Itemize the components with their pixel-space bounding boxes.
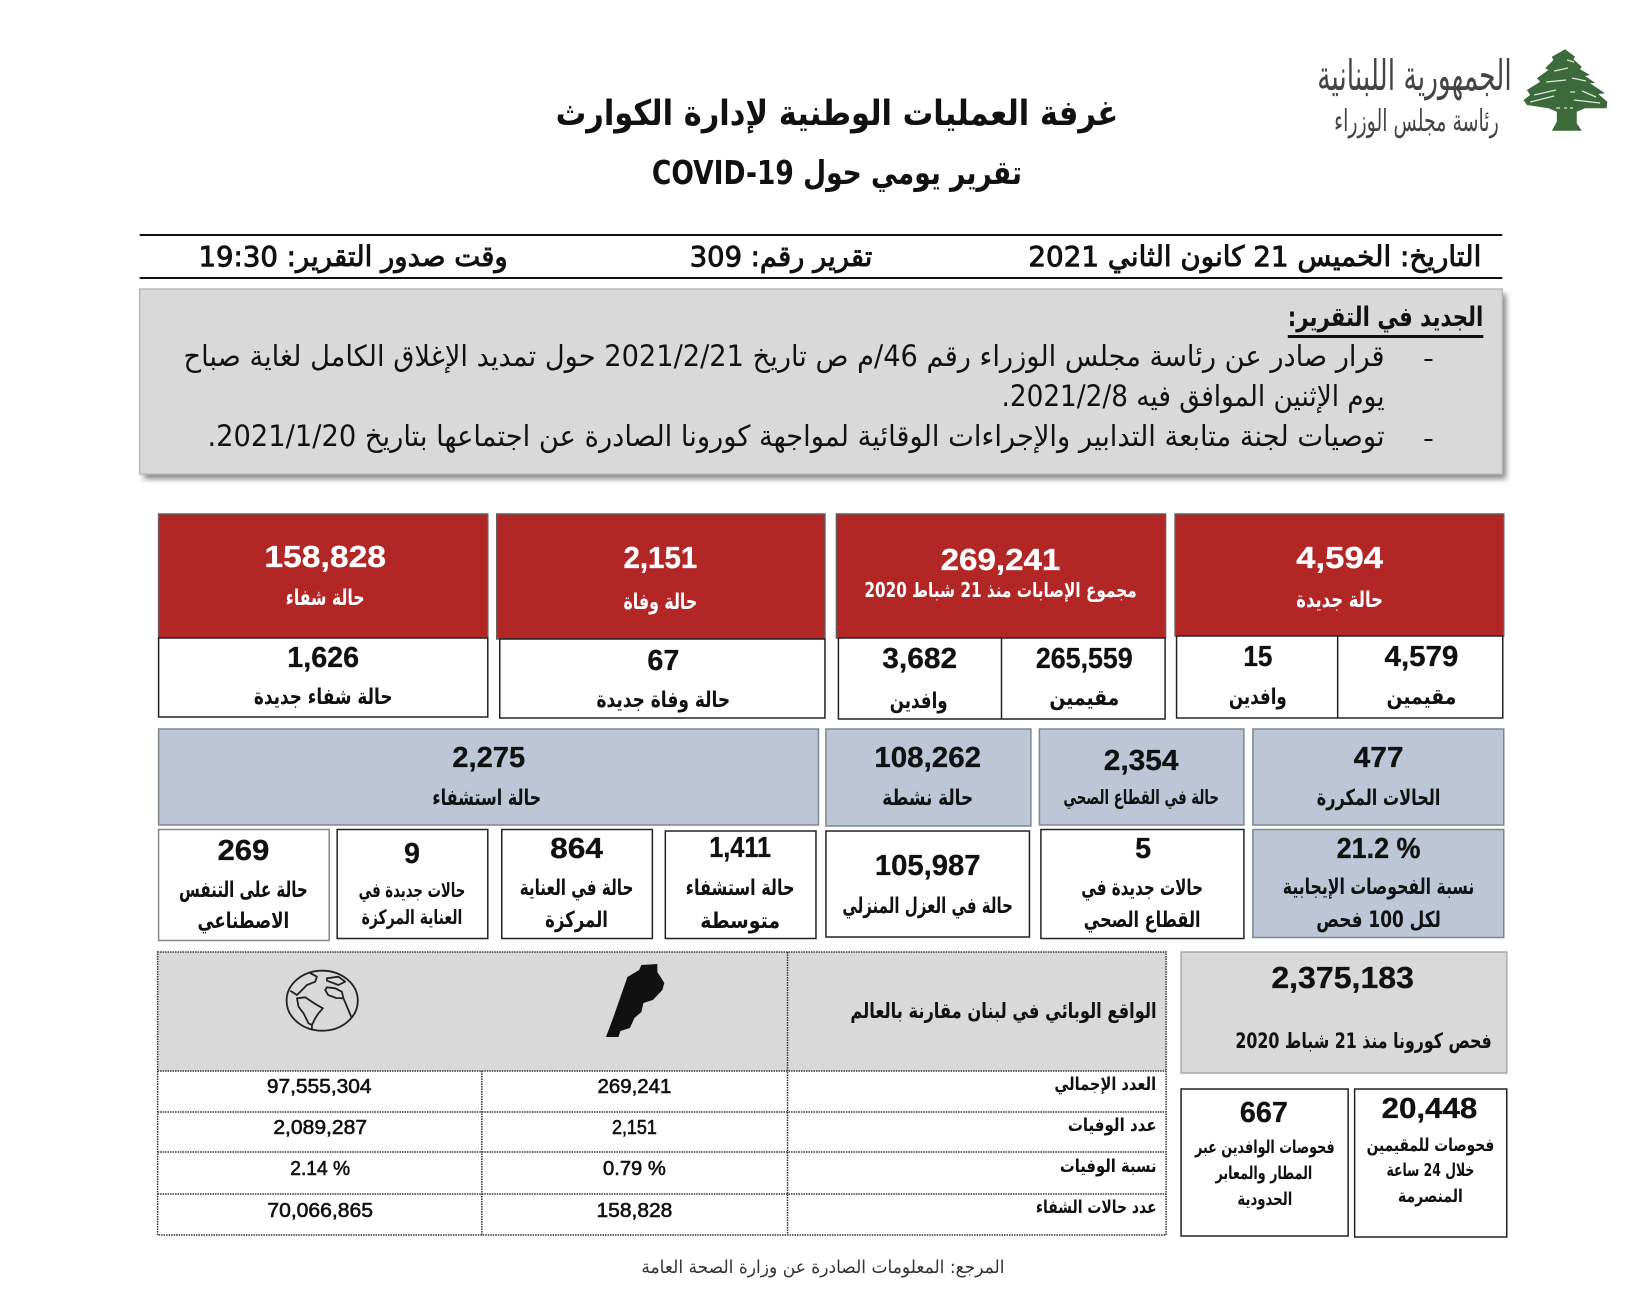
card: arrival tests: الحدودية — [1237, 1189, 1292, 1210]
card: new cases residents and arrivals: وافدين — [1229, 685, 1287, 710]
card: new health sector cases: القطاع الصحي — [1084, 908, 1201, 933]
row: recoveries: 158,828 — [597, 1200, 672, 1222]
row: total: العدد الإجمالي — [1054, 1074, 1156, 1095]
row: deaths: عدد الوفيات — [1068, 1115, 1157, 1136]
row: recoveries: 70,066,865 — [267, 1200, 373, 1222]
card: new cases residents and arrivals: 4,579 — [1385, 641, 1458, 673]
row: fatality rate — [290, 1156, 1157, 1180]
card: recoveries total: حالة شفاء — [286, 586, 365, 611]
card: health sector cases: حالة في القطاع الصحي — [1063, 785, 1219, 810]
card: total cases: مجموع الإصابات منذ 21 شباط 2020 — [864, 578, 1137, 602]
table: Lebanon compared to the world — [158, 952, 1166, 1235]
report info bar: وقت صدور التقرير: 19:30 — [199, 240, 508, 273]
logo: Arabic calligraphy: الجمهورية اللبنانية — [1317, 51, 1512, 100]
card: moderate hospitalised — [665, 831, 816, 938]
card: new ICU — [337, 830, 488, 938]
card: resident tests: خلال 24 ساعة — [1387, 1160, 1474, 1181]
card: total cases residents and arrivals — [838, 638, 1165, 719]
card: resident tests: 20,448 — [1382, 1093, 1477, 1125]
card: resident tests: فحوصات للمقيمين — [1367, 1135, 1494, 1156]
card: total cases — [836, 514, 1166, 638]
card: positivity rate: 21.2 % — [1337, 833, 1420, 865]
report info bar: التاريخ: الخميس 21 كانون الثاني 2021 — [1028, 240, 1481, 273]
card: new cases: 4,594 — [1296, 540, 1384, 575]
panel: what's new in the report: يوم الإثنين الموافق فيه 2021/2/8. — [1002, 379, 1385, 414]
card: home isolation — [826, 831, 1029, 937]
row: recoveries: عدد حالات الشفاء — [1036, 1197, 1157, 1218]
card: moderate hospitalised: متوسطة — [700, 909, 780, 934]
subtitle: تقرير يومي حول COVID-19 — [652, 153, 1022, 193]
card: new cases residents and arrivals — [1177, 636, 1503, 718]
card: home isolation: 105,987 — [875, 850, 981, 882]
card: moderate hospitalised: 1,411 — [709, 832, 771, 864]
panel: what's new in the report — [140, 289, 1506, 479]
card: recoveries total: 158,828 — [264, 539, 386, 574]
source note: المرجع: المعلومات الصادرة عن وزارة الصحة العامة — [641, 1257, 1004, 1278]
card: arrival tests: المطار والمعابر — [1215, 1163, 1312, 1184]
card: ventilated: حالة على التنفس — [179, 878, 308, 903]
card: new health sector cases: حالات جديدة في — [1081, 876, 1203, 901]
card: total cases residents and arrivals: 265,559 — [1036, 643, 1133, 675]
card: hospitalised — [159, 729, 818, 825]
card: ventilated — [159, 830, 329, 940]
card: resident tests — [1355, 1089, 1507, 1237]
card: new recoveries: 1,626 — [287, 642, 359, 674]
row: total: 97,555,304 — [267, 1076, 372, 1098]
card: moderate hospitalised: حالة استشفاء — [686, 876, 795, 901]
card: total cases residents and arrivals: مقيمين — [1049, 686, 1119, 711]
card: new cases: حالة جديدة — [1296, 588, 1383, 613]
card: new ICU: العناية المركزة — [362, 905, 462, 929]
card: arrival tests: فحوصات الوافدين عبر — [1194, 1137, 1335, 1158]
card: total tests: فحص كورونا منذ 21 شباط 2020 — [1235, 1029, 1492, 1053]
row: recoveries — [267, 1197, 1157, 1222]
card: total cases residents and arrivals: وافدين — [890, 689, 948, 714]
card: total cases residents and arrivals: 3,682 — [882, 643, 957, 675]
card: ICU: المركزة — [545, 908, 608, 933]
card: active cases — [826, 729, 1031, 826]
card: ICU — [502, 830, 652, 938]
card: hospitalised: 2,275 — [452, 742, 525, 774]
panel: what's new in the report: الجديد في التقرير: — [1288, 302, 1483, 333]
card: arrival tests: 667 — [1240, 1097, 1288, 1129]
card: new ICU: حالات جديدة في — [359, 878, 465, 903]
card: new deaths: 67 — [647, 645, 679, 677]
card: repeated cases — [1253, 729, 1504, 825]
report info bar: تقرير رقم: 309 — [690, 240, 872, 273]
card: new recoveries — [159, 638, 488, 717]
card: new health sector cases: 5 — [1135, 833, 1151, 865]
card: ventilated: الاصطناعي — [198, 909, 289, 934]
card: new deaths — [500, 639, 825, 718]
report info bar — [140, 234, 1502, 279]
card: deaths total — [497, 514, 825, 639]
card: total tests — [1181, 952, 1507, 1073]
row: fatality rate: 2.14 % — [290, 1158, 350, 1180]
card: new recoveries: حالة شفاء جديدة — [254, 685, 393, 710]
card: total tests: 2,375,183 — [1271, 960, 1414, 995]
card: total cases: 269,241 — [941, 542, 1060, 577]
card: ICU: حالة في العناية — [520, 876, 633, 901]
card: resident tests: المنصرمة — [1398, 1186, 1463, 1207]
row: deaths: 2,089,287 — [273, 1117, 367, 1139]
icon: globe — [287, 971, 358, 1031]
card: deaths total: حالة وفاة — [623, 590, 697, 615]
card: repeated cases: الحالات المكررة — [1317, 786, 1440, 811]
card: new deaths: حالة وفاة جديدة — [597, 688, 730, 713]
card: recoveries total — [159, 514, 488, 638]
card: ventilated: 269 — [217, 835, 269, 867]
card: deaths total: 2,151 — [623, 540, 697, 575]
card: new ICU: 9 — [404, 838, 420, 870]
row: deaths: 2,151 — [612, 1117, 657, 1139]
logo: Arabic calligraphy — [1317, 51, 1512, 139]
row: fatality rate: 0.79 % — [603, 1158, 666, 1180]
card: positivity rate: نسبة الفحوصات الإيجابية — [1283, 875, 1474, 900]
card: new health sector cases — [1041, 830, 1244, 938]
icon: Lebanon map — [606, 964, 664, 1037]
row: total: 269,241 — [598, 1076, 671, 1098]
card: arrival tests — [1181, 1089, 1348, 1236]
row: deaths — [273, 1115, 1157, 1139]
card: new cases residents and arrivals: 15 — [1243, 641, 1272, 673]
card: ICU: 864 — [550, 833, 603, 865]
logo: Arabic calligraphy: رئاسة مجلس الوزراء — [1334, 104, 1499, 139]
card: hospitalised: حالة استشفاء — [432, 786, 541, 811]
card: positivity rate — [1253, 830, 1504, 938]
card: active cases: حالة نشطة — [882, 786, 973, 811]
card: health sector cases — [1039, 729, 1244, 825]
card: health sector cases: 2,354 — [1104, 745, 1179, 777]
card: active cases: 108,262 — [874, 742, 981, 774]
row: total — [267, 1074, 1156, 1098]
card: repeated cases: 477 — [1354, 742, 1403, 774]
row: fatality rate: نسبة الوفيات — [1060, 1156, 1157, 1177]
card: new cases — [1175, 514, 1504, 636]
panel: what's new in the report: توصيات لجنة متابعة التدابير والإجراءات الوقائية لمواجهة كورونا الصادرة عن اجتماعها بتاريخ 2021/1/20. — [207, 419, 1385, 454]
title: غرفة العمليات الوطنية لإدارة الكوارث — [556, 94, 1118, 134]
card: new cases residents and arrivals: مقيمين — [1387, 685, 1456, 710]
table heading: الواقع الوبائي في لبنان مقارنة بالعالم — [850, 999, 1157, 1023]
card: home isolation: حالة في العزل المنزلي — [842, 894, 1013, 919]
panel: what's new in the report: قرار صادر عن رئاسة مجلس الوزراء رقم 46/م ص تاريخ 2021/2/21 حول تمديد الإغلاق الكامل لغاية صباح — [184, 339, 1385, 374]
logo: Lebanese cedar tree — [1524, 49, 1607, 131]
card: positivity rate: لكل 100 فحص — [1316, 908, 1441, 933]
